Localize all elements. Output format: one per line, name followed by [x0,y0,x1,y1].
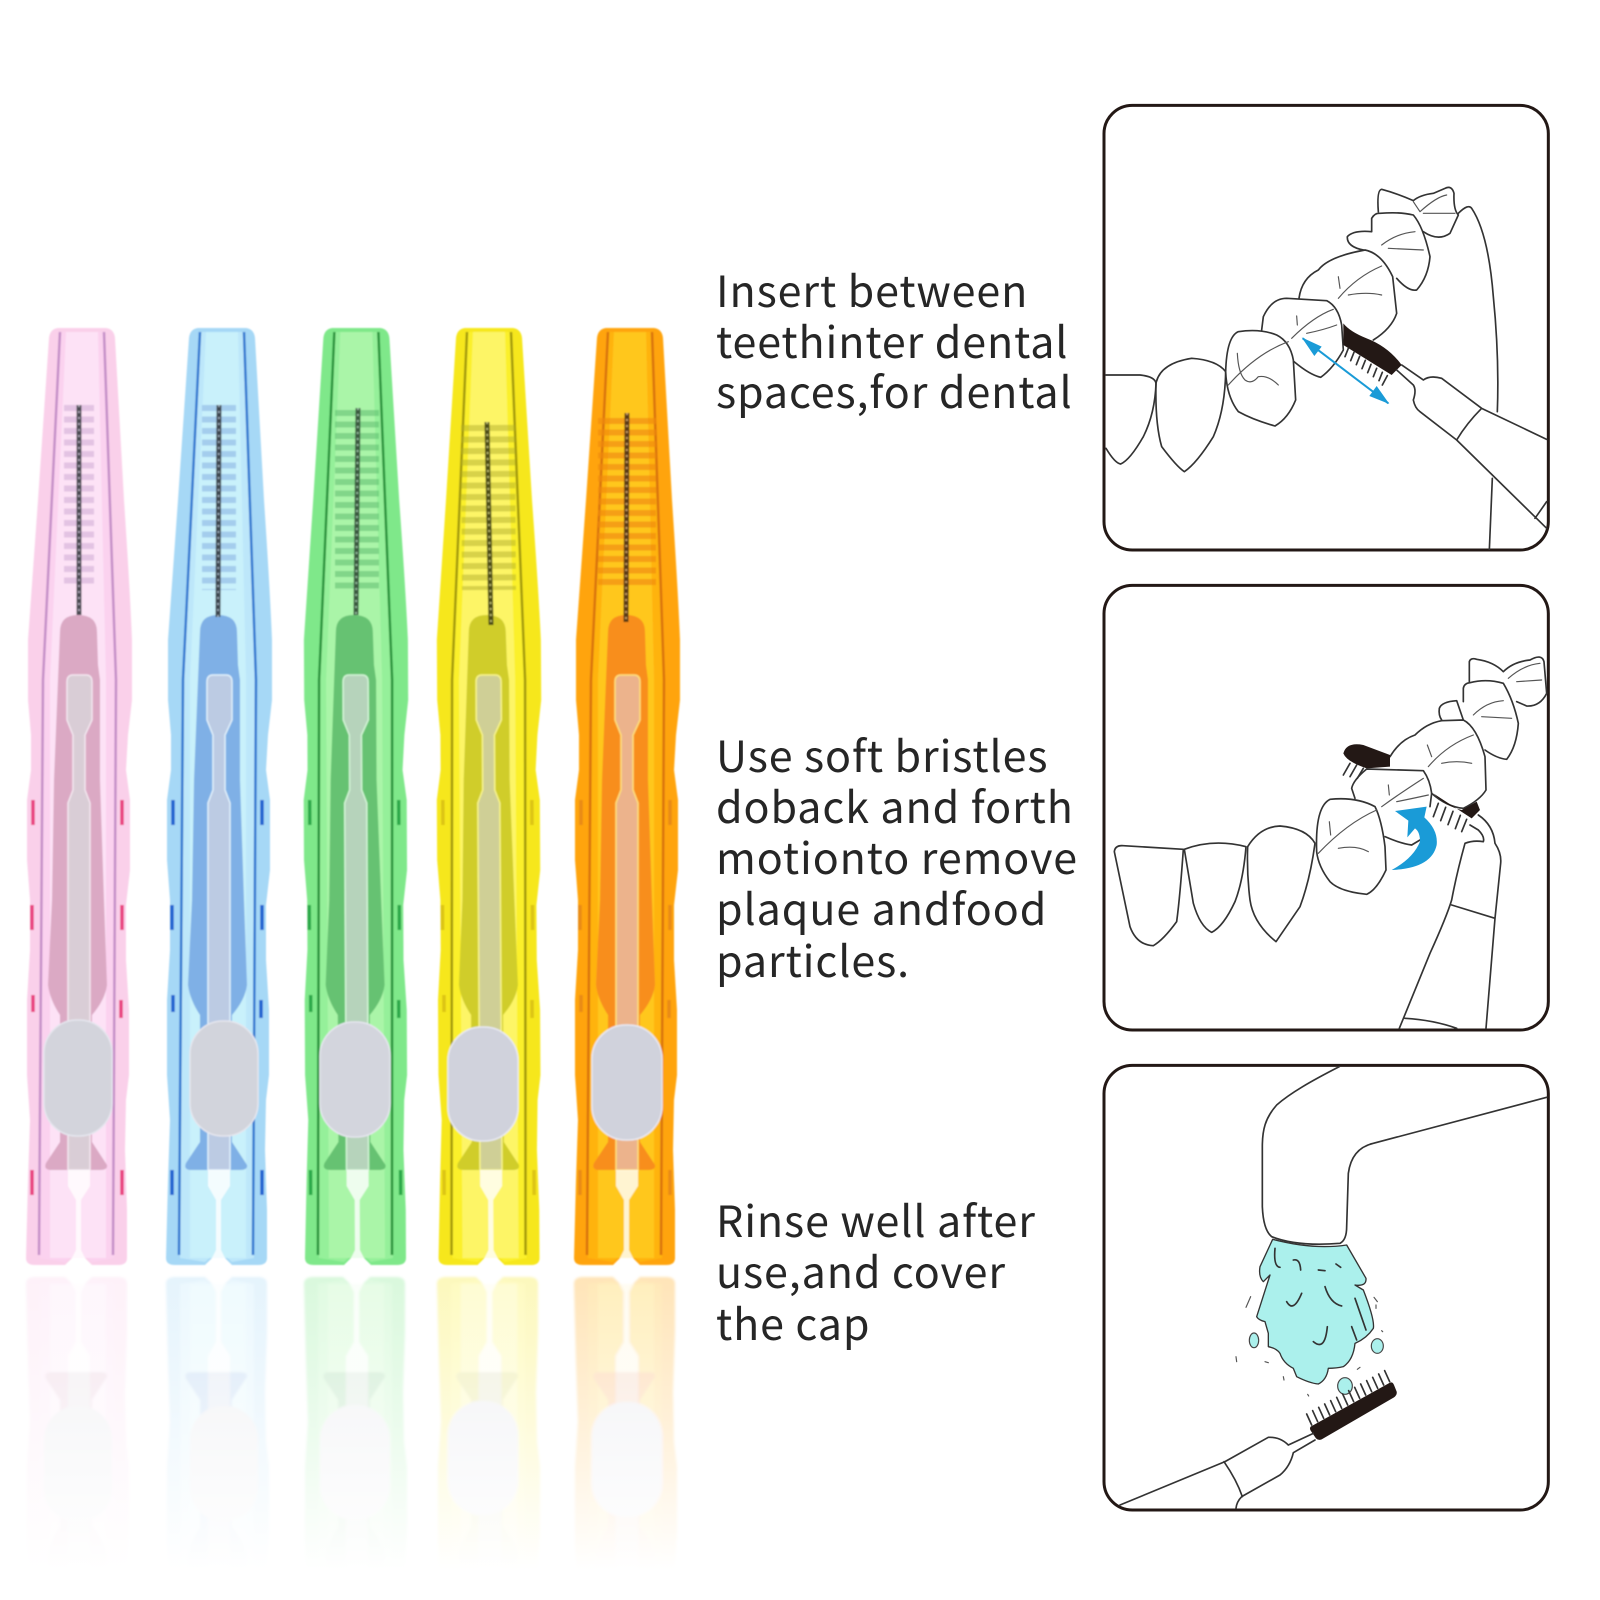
text: step 3: use,and cover [716,1239,1006,1301]
brush: orange [574,328,680,1265]
illustration: tap water and brush [1120,1067,1547,1508]
text: step 2: motionto remove [716,825,1078,887]
text: step 2: doback and forth [716,774,1074,836]
illustration: teeth and brush [1106,187,1547,550]
text: step 1: Insert between [716,258,1028,320]
brush: blue [166,328,272,1265]
panel frame [1104,585,1548,1030]
arrow: curved motion [1392,807,1437,870]
text: step 3: Rinse well after [716,1188,1036,1250]
panel: rinse under tap [1104,1065,1548,1510]
reflection of brushes on the surface [0,1270,710,1600]
arrow: back and forth [1302,337,1389,404]
panel frame [1104,105,1548,550]
text: step 3: the cap [716,1291,870,1353]
text: step 2: Use soft bristles [716,723,1048,785]
text: step 1: teethinter dental [716,309,1068,371]
panel: back and forth motion [1104,585,1548,1030]
brush: pink [26,328,132,1265]
text: step 2: particles. [716,928,910,990]
brush [1120,1371,1397,1508]
text: step 2: plaque andfood [716,876,1047,938]
panel frame [1104,1065,1548,1510]
brush: yellow [433,328,545,1265]
text: step 1: spaces,for dental [716,359,1073,421]
tap [1262,1067,1547,1244]
panel: insert between teeth [1104,105,1548,550]
illustration: brushing teeth [1114,657,1547,1028]
brush: green [300,328,411,1265]
water stream [1236,1239,1383,1396]
